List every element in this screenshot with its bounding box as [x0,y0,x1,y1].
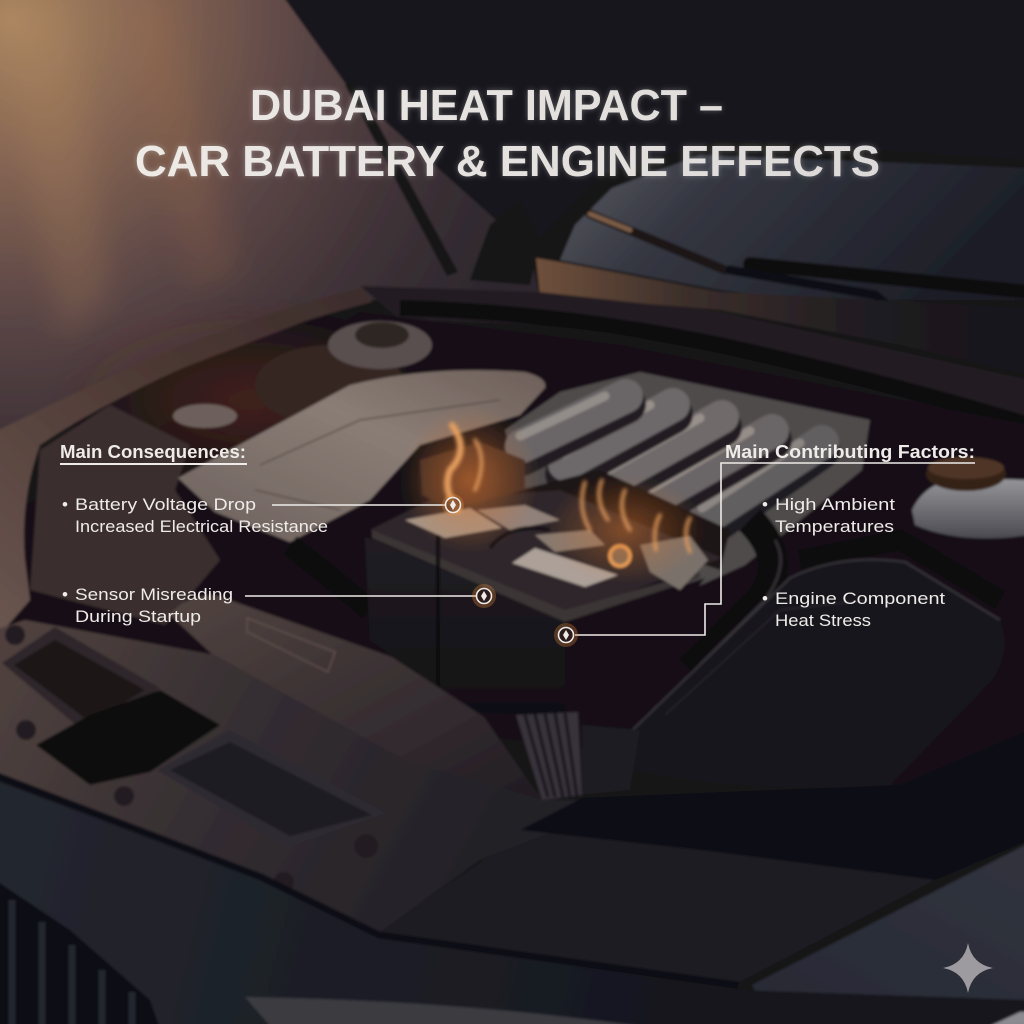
heat glow [400,405,705,585]
wipers [590,214,1024,349]
engine cover [178,370,545,542]
heading: factors: Main Contributing Factors: [725,442,975,462]
red rear bay [60,310,440,490]
item: sensor misreading: During Startup [75,607,201,626]
item: ambient temperatures: Temperatures [775,517,894,536]
central recess [379,815,935,983]
connector: sensor misreading [245,584,496,608]
item: voltage drop: Increased Electrical Resistance [75,517,328,536]
item: sensor misreading: Sensor Misreading [75,585,233,604]
hood strut [345,80,458,276]
dark gap behind battery [520,470,730,570]
right channel [520,730,1024,880]
brake booster [255,321,432,425]
battery [365,490,722,718]
heading: consequences: Main Consequences: [60,442,246,462]
cowl copper band [536,258,1024,375]
flames [447,425,690,552]
hoses left [290,545,370,610]
connector: voltage drop [272,494,464,516]
corrugated tube [516,712,640,800]
panel: main consequences [60,442,328,626]
grille [0,880,160,1024]
item: heat stress: • [762,589,768,608]
title: CAR BATTERY & ENGINE EFFECTS [135,137,880,186]
left trays [2,627,386,847]
engine bay floor [0,312,1024,800]
small box on battery [420,442,525,510]
connector: contributing factors [554,463,975,647]
strut bracket [470,200,540,285]
item: voltage drop: Battery Voltage Drop [75,495,256,514]
dipstick [436,535,440,690]
icon: sparkle watermark [943,943,993,993]
open hood underside [282,0,1024,250]
item: sensor misreading: • [62,585,68,604]
item: voltage drop: • [62,495,68,514]
bottom headlight [245,997,640,1024]
washer cap [173,404,237,428]
left fender [0,288,372,640]
title: DUBAI HEAT IMPACT – [250,81,723,130]
panel: contributing factors [725,442,975,630]
sunlit sky area [0,0,540,440]
cowl ledge [360,286,1024,420]
title [135,81,880,186]
hoses right [690,520,1000,670]
air duct [170,595,542,800]
item: ambient temperatures: • [762,495,768,514]
black channel [400,308,1024,425]
right hood wedge [752,843,1024,1000]
right cover [616,560,1004,788]
dark lip [0,775,738,985]
light rays [0,0,240,340]
lower hood [0,780,1024,1024]
item: heat stress: Engine Component [775,589,945,608]
panel bolts [5,625,378,892]
item: ambient temperatures: High Ambient [775,495,895,514]
left bay wall [30,405,220,625]
radiator support panel [0,620,640,933]
windshield [560,155,1024,300]
intake manifold [505,372,870,590]
coolant cap and reservoir [912,457,1024,538]
item: heat stress: Heat Stress [775,611,871,630]
